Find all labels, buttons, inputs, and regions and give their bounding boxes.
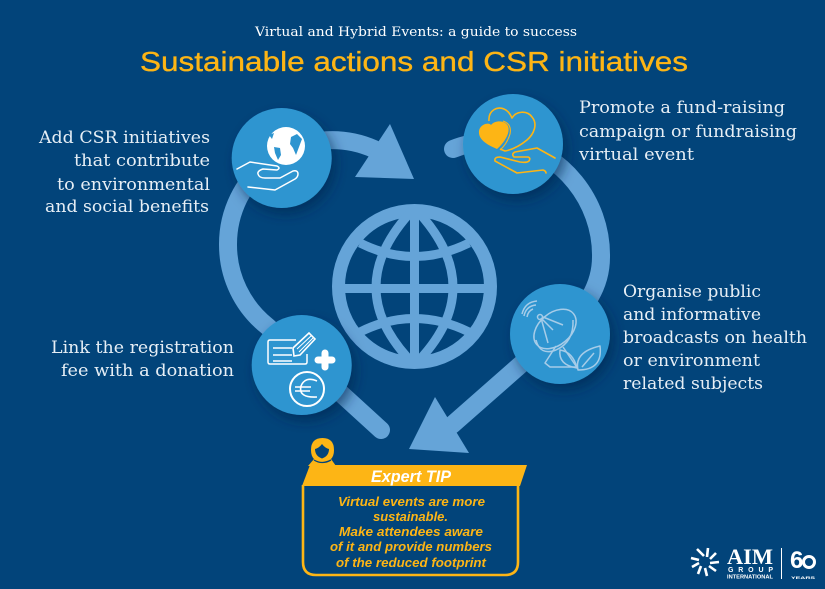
expert tip body: Make attendees aware [339, 524, 483, 539]
text: fund-raising campaign [578, 98, 797, 164]
text: registration fee donation [51, 338, 234, 380]
arrow: right loop towards expert tip [409, 142, 601, 453]
expert tip box [303, 485, 518, 575]
text: add CSR initiatives: that contribute [74, 151, 210, 170]
expert tip header [302, 465, 527, 486]
expert tip panel [302, 438, 527, 575]
text: add CSR initiatives: Add CSR initiatives [38, 128, 210, 147]
logo: AIM Group International, 60 years: GROUP [728, 567, 773, 574]
icon: hand holding earth [232, 108, 332, 208]
text: registration fee donation: Link the registration [51, 338, 234, 357]
central globe icon [338, 208, 490, 365]
text: public broadcasts: and informative [623, 305, 761, 324]
logo star [691, 548, 719, 576]
text: add CSR initiatives [38, 128, 210, 216]
icon: hands with hearts [463, 94, 563, 194]
logo: AIM Group International, 60 years: INTERNATIONAL [727, 574, 773, 580]
expert tip body [330, 494, 492, 570]
expert tip heading: Expert TIP [371, 467, 452, 486]
text: registration fee donation: fee with a donation [61, 361, 234, 380]
expert tip body: of the reduced footprint [336, 555, 487, 570]
text: fund-raising campaign: Promote a fund-raising [579, 98, 785, 117]
text: public broadcasts: or environment [623, 351, 760, 370]
text: public broadcasts: Organise public [623, 282, 761, 301]
text: fund-raising campaign: campaign or fundraising [579, 122, 797, 141]
icon: expert person [308, 438, 336, 466]
arrow: left loop from registration fee to top [228, 124, 414, 430]
expert tip body: sustainable. [373, 509, 448, 524]
text: fund-raising campaign: virtual event [578, 145, 694, 164]
subtitle: Virtual and Hybrid Events: a guide to success [254, 25, 577, 40]
title: Sustainable actions and CSR initiatives [140, 46, 688, 77]
logo: AIM Group International, 60 years: 6 [790, 547, 803, 574]
icon: cheque, plus and euro [252, 315, 352, 415]
text: add CSR initiatives: and social benefits [45, 197, 209, 216]
logo: AIM Group International, 60 years [691, 544, 816, 580]
text: public broadcasts: broadcasts on health [623, 328, 807, 347]
icon: satellite dish with leaves [510, 284, 610, 384]
text: public broadcasts: related subjects [623, 374, 763, 393]
expert tip body: Virtual events are more [338, 494, 485, 509]
text: add CSR initiatives: to environmental [57, 175, 210, 194]
logo: AIM Group International, 60 years: YEARS [791, 575, 816, 580]
logo: AIM Group International, 60 years: AIM [727, 544, 773, 569]
expert tip body: of it and provide numbers [330, 539, 492, 554]
text: public broadcasts [623, 282, 807, 393]
